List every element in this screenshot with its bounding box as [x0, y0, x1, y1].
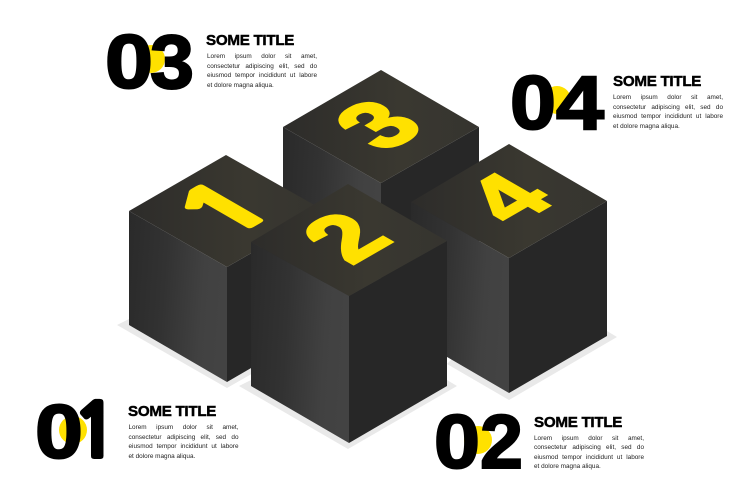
body text 04: consectetur adipiscing elit, sed do [613, 104, 723, 111]
body text 04: et dolore magna aliqua. [613, 123, 680, 130]
body text 01 [128, 424, 238, 460]
big number 03 [105, 20, 194, 105]
body text 01: et dolore magna aliqua. [128, 453, 195, 460]
body text 02 [534, 434, 644, 470]
text block 04 [613, 73, 723, 130]
body text 02: consectetur adipiscing elit, sed do [534, 444, 644, 451]
body text 02: et dolore magna aliqua. [534, 463, 601, 470]
big number 01: 0 [35, 390, 83, 475]
title 02: SOME TITLE [534, 414, 622, 431]
title 04: SOME TITLE [613, 73, 701, 90]
number 2: 2 [280, 199, 412, 276]
body text 04 [613, 94, 723, 130]
big number 03: 0 [105, 20, 153, 105]
body text 01: consectetur adipiscing elit, sed do [128, 434, 238, 441]
number 3: 3 [312, 87, 445, 163]
cube 2 [251, 184, 447, 443]
number 4: 4 [442, 160, 574, 237]
big number 02 [434, 400, 523, 485]
title 03: SOME TITLE [206, 32, 294, 49]
body text 04: Lorem ipsum dolor sit amet, [613, 94, 723, 101]
big number 02: 2 [480, 400, 523, 485]
big number 02: 0 [434, 400, 480, 485]
big number 03: 3 [150, 20, 194, 105]
body text 01: eiusmod tempor incididunt ut labore [128, 443, 238, 450]
body text 03: eiusmod tempor incididunt ut labore [207, 72, 317, 79]
text block 02 [534, 414, 644, 470]
floor shadows [117, 319, 617, 449]
cube 4 [411, 144, 607, 393]
text block 01 [128, 403, 238, 460]
big number 04: 4 [556, 61, 604, 146]
big number 01 [35, 390, 119, 475]
title 01: SOME TITLE [128, 403, 216, 420]
body text 02: eiusmod tempor incididunt ut labore [534, 454, 644, 461]
body text 04: eiusmod tempor incididunt ut labore [613, 113, 723, 120]
cube 1 [129, 155, 325, 382]
big number 04: 0 [510, 61, 556, 146]
big number 01: 1 [72, 396, 119, 469]
body text 01: Lorem ipsum dolor sit amet, [128, 424, 238, 431]
number 1: 1 [156, 169, 295, 250]
body text 02: Lorem ipsum dolor sit amet, [534, 434, 644, 442]
cube 3 [283, 70, 479, 326]
body text 03: et dolore magna aliqua. [207, 82, 274, 89]
body text 03: consectetur adipiscing elit, sed do [207, 63, 317, 70]
big number 04 [510, 61, 604, 146]
body text 03: Lorem ipsum dolor sit amet, [207, 53, 317, 60]
body text 03 [207, 53, 317, 89]
text block 03 [206, 32, 317, 89]
